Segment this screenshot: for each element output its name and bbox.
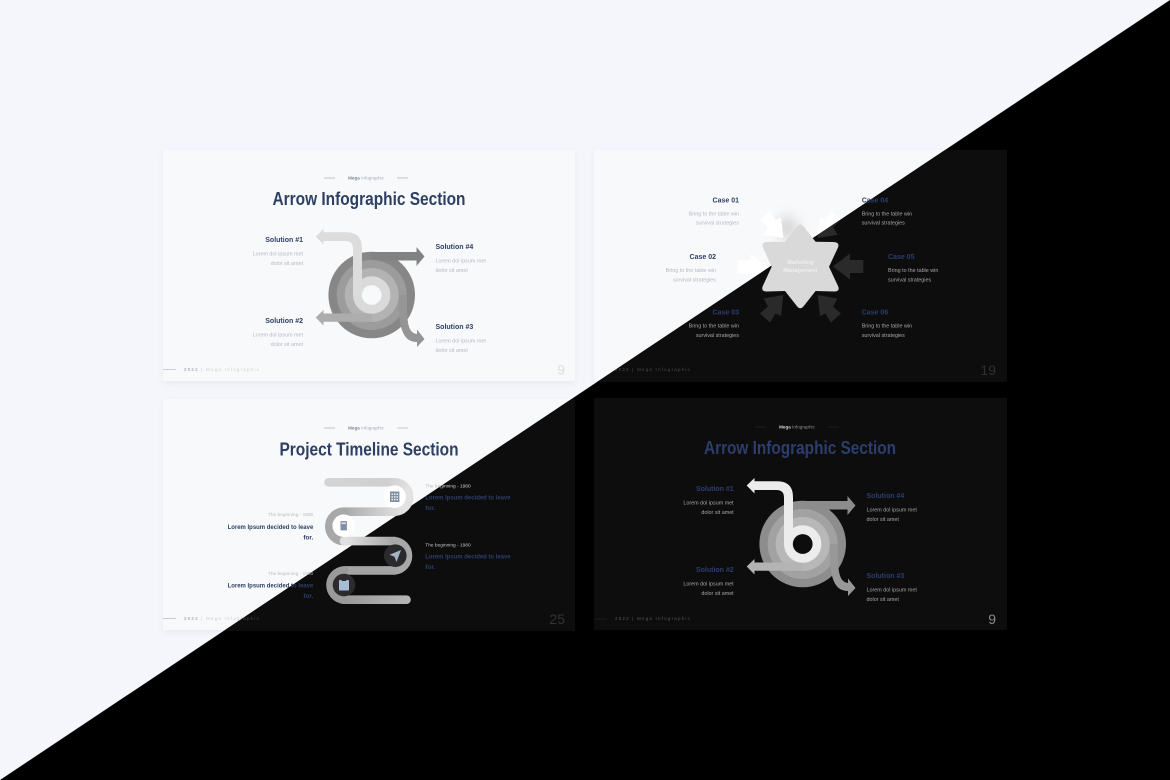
text block: Case 05: survival strategies xyxy=(888,277,931,283)
arrow: Solution 4 xyxy=(372,247,424,266)
footer: 2022 | Mega Infographic xyxy=(615,616,691,621)
text block: Solution 1: Lorem dol ipsum met xyxy=(683,500,734,506)
text block: Case 03: survival strategies xyxy=(696,333,739,339)
text block: Solution 4: Lorem dol ipsum met xyxy=(436,258,486,264)
text block: timeline left 2 xyxy=(292,572,314,598)
text block: timeline right 2: The beginning - 1980 xyxy=(425,543,471,549)
text block: Solution 1: Solution #1 xyxy=(265,237,303,244)
text block: Case 03: Bring to the table win xyxy=(689,324,739,330)
eyebrow: Mega Infographic: Mega Infographic xyxy=(348,176,385,181)
text block: timeline right 1: The beginning - 1980 xyxy=(425,483,471,489)
panel: light arrow infographic slide xyxy=(163,176,572,382)
text block: Solution 2: Lorem dol ipsum met xyxy=(683,582,734,588)
arrow: Solution 2 xyxy=(747,559,803,574)
text block: Case 01 xyxy=(689,198,739,227)
text block: Solution 2: Solution #2 xyxy=(696,567,734,574)
text block: Case 06: Bring to the table win xyxy=(862,324,912,330)
text block: timeline left 1: The beginning - 1980 xyxy=(268,512,314,518)
text block: Solution 1: Solution #1 xyxy=(696,486,734,493)
text block: Solution 1 xyxy=(253,237,303,267)
text block: Solution 3: Solution #3 xyxy=(866,573,904,580)
text block: Case 02: Bring to the table win xyxy=(666,268,716,274)
text block: Case 05: Case 05 xyxy=(888,254,915,261)
footer: 2022 | Mega Infographic xyxy=(184,616,260,621)
text block: Case 02: survival strategies xyxy=(673,277,716,283)
text block: Case 03 xyxy=(689,310,739,339)
chart: concentric circle with four arrows xyxy=(316,229,424,347)
timeline: winding road with four icons xyxy=(328,482,409,600)
text block: timeline right 1: The beginning - 1980 xyxy=(425,483,471,489)
text block: Solution 3: Solution #3 xyxy=(436,324,473,331)
panel: star slide, dark part xyxy=(594,150,1007,382)
text block: timeline right 1 xyxy=(425,483,511,512)
text block: Case 02: Case 02 xyxy=(690,254,716,261)
eyebrow: Mega Infographic xyxy=(324,176,408,180)
text block: Case 04: survival strategies xyxy=(862,221,905,227)
text block: timeline right 2: Lorem Ipsum decided to leave xyxy=(425,554,511,561)
arrow: Solution 3 xyxy=(399,295,424,347)
page number 25: 25 xyxy=(549,611,565,627)
text block: Case 03: survival strategies xyxy=(696,333,739,339)
text block: Case 01: Bring to the table win xyxy=(689,211,739,217)
text block: Solution 1 xyxy=(683,486,734,516)
eyebrow: Mega Infographic xyxy=(755,425,839,430)
arrow: Solution 1 and centre ring xyxy=(316,229,386,309)
page number 9: 9 xyxy=(988,611,996,627)
text block: timeline left 2: The beginning - 1980 xyxy=(268,571,314,577)
text block: Case 04: Case 04 xyxy=(862,198,888,204)
arrow: Solution 1 and centre ring xyxy=(747,478,817,558)
text block: Case 05 xyxy=(888,254,938,283)
text block: timeline left 2: The beginning - 1980 xyxy=(268,571,314,577)
text block: Case 03: Bring to the table win xyxy=(689,324,739,330)
text block: Case 03: Case 03 xyxy=(713,310,739,316)
text block: Solution 4 xyxy=(436,244,486,274)
icon: white arrows pointing to star xyxy=(766,214,784,238)
text block: Solution 2: Lorem dol ipsum met xyxy=(253,332,303,338)
star: Marketing Management xyxy=(762,224,839,308)
text block: Case 04: Bring to the table win xyxy=(862,211,912,217)
text block: Case 05: Bring to the table win xyxy=(888,268,938,274)
page number 9: 9 xyxy=(557,362,565,378)
text block: Solution 3: Lorem dol ipsum met xyxy=(436,338,486,344)
text block: Solution 2: dolor sit amet xyxy=(271,342,303,348)
text block: Case 06: Case 06 xyxy=(862,310,888,316)
star: Marketing Management: Management xyxy=(783,268,818,274)
panel: timeline slide, dark part xyxy=(224,399,575,631)
text block: Solution 2 xyxy=(683,567,734,597)
text block: Solution 1: dolor sit amet xyxy=(701,510,734,516)
panel: dark arrow infographic slide xyxy=(594,398,1007,630)
text block: Solution 3: dolor sit amet xyxy=(866,597,899,603)
text block: timeline left 1 xyxy=(228,512,314,541)
footer xyxy=(163,368,259,372)
panel: timeline slide, light part xyxy=(163,426,458,632)
text block: Case 06 xyxy=(862,310,912,339)
text block: Solution 4: Solution #4 xyxy=(866,493,904,500)
text block: Solution 4 xyxy=(866,493,917,523)
eyebrow: Mega Infographic: Mega Infographic xyxy=(779,425,816,430)
text block: Case 02 xyxy=(666,254,716,283)
page number 19: 19 xyxy=(980,362,996,378)
text block: Solution 4: dolor sit amet xyxy=(436,268,468,274)
icon: dark arrows pointing to star xyxy=(750,220,864,322)
heading: Arrow Infographic Section: Arrow Infographic Section xyxy=(272,188,466,209)
text block: timeline left 2: Lorem Ipsum decided to leave xyxy=(228,583,314,590)
footer: 2022 | Mega Infographic xyxy=(184,367,260,372)
text block: Case 03 xyxy=(689,310,739,339)
icon: paper plane xyxy=(384,544,407,567)
footer: 2022 | Mega Infographic xyxy=(615,367,691,372)
heading: Project Timeline Section: Project Timeline Section xyxy=(280,438,458,460)
text block: timeline right 2: for. xyxy=(425,564,435,571)
text block: timeline left 1: Lorem Ipsum decided to leave xyxy=(228,524,314,531)
text block: timeline right 1: Lorem Ipsum decided to leave xyxy=(425,494,511,501)
text block: timeline right 1: for. xyxy=(425,505,435,512)
text block: Solution 3: Lorem dol ipsum met xyxy=(866,588,917,594)
eyebrow: Mega Infographic xyxy=(324,426,408,430)
text block: Solution 3 xyxy=(866,573,917,603)
light half of the page xyxy=(163,176,872,632)
eyebrow: Mega Infographic: Mega Infographic xyxy=(348,426,385,431)
text block: timeline left 2 xyxy=(228,572,312,589)
text block: Solution 1: dolor sit amet xyxy=(271,261,303,267)
text block: Solution 4: Solution #4 xyxy=(436,244,473,251)
chart: concentric circle with four arrows xyxy=(747,478,856,596)
icon: clipboard xyxy=(333,574,355,596)
text block: Solution 4: Lorem dol ipsum met xyxy=(866,508,917,514)
text block: timeline left 1: for. xyxy=(303,534,314,541)
text block: Case 03: Case 03 xyxy=(713,310,739,316)
text block: Case 06: survival strategies xyxy=(862,333,905,339)
footer xyxy=(163,616,242,621)
text block: Solution 2 xyxy=(253,318,303,348)
heading: Arrow Infographic Section: Arrow Infographic Section xyxy=(704,437,896,458)
icon: calculator xyxy=(332,514,355,537)
star glow xyxy=(776,217,798,239)
icon: building xyxy=(383,485,406,508)
star: Marketing Management: Marketing xyxy=(787,260,814,266)
text block: Case 04 xyxy=(862,198,912,227)
panel: star slide, light part xyxy=(597,198,872,382)
text block: Solution 3 xyxy=(436,324,486,354)
text block: Solution 4: dolor sit amet xyxy=(866,517,899,523)
text block: timeline right 2 xyxy=(425,543,511,571)
text block: Solution 1: Lorem dol ipsum met xyxy=(253,252,303,258)
text block: timeline left 2: for. xyxy=(303,593,314,600)
text block: timeline left 2: Lorem Ipsum decided to leave xyxy=(228,583,314,590)
text block: Solution 2: dolor sit amet xyxy=(701,591,734,597)
text block: Case 01: survival strategies xyxy=(696,221,739,227)
arrow: Solution 2 xyxy=(316,310,372,326)
text block: Case 04: Case 04 xyxy=(862,198,888,204)
footer: 2022 | Mega Infographic xyxy=(184,616,260,621)
text block: timeline left 2: for. xyxy=(303,593,314,600)
arrow: Solution 3 xyxy=(830,544,856,596)
text block: Solution 3: dolor sit amet xyxy=(436,348,468,354)
text block: Solution 2: Solution #2 xyxy=(265,318,303,325)
arrow: Solution 4 xyxy=(803,496,856,515)
text block: Case 01: Case 01 xyxy=(713,198,739,204)
